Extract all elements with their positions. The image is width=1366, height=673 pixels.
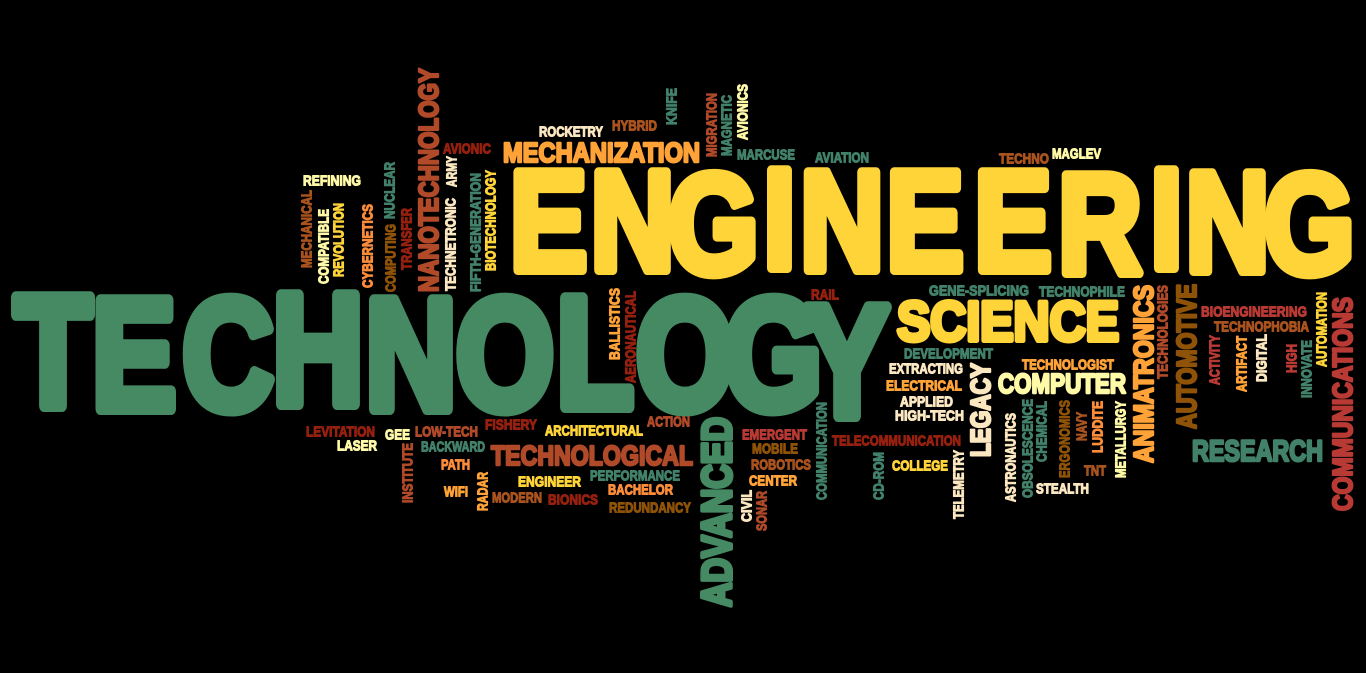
word: COMPUTER: COMPUTER (998, 368, 1126, 399)
word: LOW-TECH: LOW-TECH (415, 424, 478, 440)
word: CYBERNETICS: CYBERNETICS (360, 204, 376, 288)
word: SCIENCE: SCIENCE (897, 290, 1119, 352)
word: INNOVATE: INNOVATE (1298, 340, 1316, 398)
word: MAGLEV: MAGLEV (1052, 146, 1101, 162)
word: FISHERY: FISHERY (485, 416, 537, 434)
word: PERFORMANCE: PERFORMANCE (590, 468, 680, 484)
word: INSTITUTE: INSTITUTE (400, 443, 416, 503)
word: COLLEGE: COLLEGE (892, 458, 948, 474)
word: TECHNOLOGICAL: TECHNOLOGICAL (491, 440, 693, 471)
word: MAGNETIC: MAGNETIC (718, 95, 736, 156)
word: TELECOMMUNICATION: TELECOMMUNICATION (832, 432, 961, 450)
word: LEVITATION: LEVITATION (306, 424, 375, 440)
word: ROBOTICS: ROBOTICS (751, 456, 811, 474)
word: REVOLUTION: REVOLUTION (330, 203, 348, 277)
word: METALLURGY: METALLURGY (1112, 401, 1130, 478)
word: PATH: PATH (441, 456, 470, 474)
word: CIVIL: CIVIL (738, 490, 756, 522)
word: ARCHITECTURAL: ARCHITECTURAL (545, 422, 643, 440)
word: KNIFE: KNIFE (664, 88, 680, 125)
word: MARCUSE: MARCUSE (737, 146, 795, 164)
word: NANOTECHNOLOGY: NANOTECHNOLOGY (413, 68, 444, 292)
word: TECHNO: TECHNO (999, 150, 1049, 168)
word: COMMUNICATIONS: COMMUNICATIONS (1327, 297, 1358, 511)
word: LEGACY: LEGACY (965, 363, 996, 457)
word: ELECTRICAL: ELECTRICAL (886, 378, 962, 394)
word: RESEARCH: RESEARCH (1192, 435, 1323, 468)
word: REFINING: REFINING (303, 172, 361, 190)
word: TELEMETRY: TELEMETRY (950, 450, 968, 519)
word: COMMUNICATION: COMMUNICATION (814, 402, 830, 500)
word: AVIONIC: AVIONIC (443, 140, 491, 158)
word: ADVANCED: ADVANCED (693, 417, 740, 607)
word: TECHNOPHILE: TECHNOPHILE (1039, 284, 1125, 300)
word: ANIMATRONICS: ANIMATRONICS (1128, 285, 1159, 463)
word: RADAR: RADAR (474, 472, 492, 511)
word: MOBILE: MOBILE (752, 440, 798, 458)
word: TECHNOLOGIES: TECHNOLOGIES (1154, 285, 1172, 379)
word: TRANSFER: TRANSFER (398, 208, 416, 270)
word: ERGONOMICS: ERGONOMICS (1056, 400, 1074, 478)
word: LUDDITE: LUDDITE (1090, 401, 1106, 453)
word: ACTIVITY: ACTIVITY (1206, 335, 1224, 385)
word: AERONAUTICAL: AERONAUTICAL (622, 291, 640, 383)
word: ACTION: ACTION (647, 414, 690, 430)
word: ENGINEER: ENGINEER (518, 474, 581, 490)
word: TECHNETRONIC: TECHNETRONIC (442, 198, 460, 291)
word: GEE: GEE (385, 426, 410, 444)
word: MECHANIZATION: MECHANIZATION (503, 137, 700, 168)
word: AVIATION: AVIATION (815, 150, 869, 166)
word: DIGITAL: DIGITAL (1254, 334, 1270, 382)
word: FIFTH-GENERATION: FIFTH-GENERATION (468, 173, 484, 292)
word: CENTER: CENTER (749, 472, 797, 490)
word: BIOENGINEERING: BIOENGINEERING (1201, 304, 1307, 320)
word: BACHELOR: BACHELOR (608, 482, 673, 498)
word: NAVY: NAVY (1074, 412, 1090, 441)
word: AVIONICS: AVIONICS (734, 84, 752, 140)
word: STEALTH: STEALTH (1036, 480, 1089, 498)
word: ASTRONAUTICS: ASTRONAUTICS (1002, 413, 1020, 502)
word: HIGH: HIGH (1284, 344, 1300, 373)
word: AUTOMATION: AUTOMATION (1314, 292, 1330, 367)
word: REDUNDANCY: REDUNDANCY (609, 500, 691, 516)
word: CHEMICAL: CHEMICAL (1034, 401, 1050, 462)
word: TNT: TNT (1084, 462, 1106, 480)
word: APPLIED: APPLIED (900, 394, 953, 410)
word: MIGRATION: MIGRATION (704, 93, 720, 157)
word: BIOTECHNOLOGY: BIOTECHNOLOGY (482, 170, 500, 271)
word: BIONICS: BIONICS (548, 492, 598, 508)
word: RAIL: RAIL (811, 286, 839, 304)
word: TECHNOLOGY: TECHNOLOGY (14, 262, 889, 450)
word: SONAR: SONAR (754, 491, 770, 531)
word: BACKWARD: BACKWARD (421, 438, 485, 456)
word: ARTIFACT: ARTIFACT (1234, 336, 1250, 392)
word: TECHNOPHOBIA: TECHNOPHOBIA (1214, 318, 1309, 336)
word: MODERN: MODERN (492, 490, 542, 506)
word: EMERGENT: EMERGENT (742, 426, 807, 444)
word: CD-ROM: CD-ROM (870, 452, 888, 500)
word: HIGH-TECH: HIGH-TECH (895, 408, 964, 424)
word: AUTOMOTIVE: AUTOMOTIVE (1171, 284, 1202, 429)
word: ENGINEERING: ENGINEERING (510, 139, 1355, 304)
word: DEVELOPMENT: DEVELOPMENT (904, 346, 993, 362)
word: BALLISTICS: BALLISTICS (606, 288, 624, 360)
word: OBSOLESCENCE: OBSOLESCENCE (1020, 399, 1036, 498)
word: ARMY: ARMY (444, 156, 460, 187)
word: MECHANICAL: MECHANICAL (298, 190, 316, 268)
word: WIFI: WIFI (444, 484, 468, 500)
word: EXTRACTING: EXTRACTING (889, 360, 963, 378)
word: COMPUTING: COMPUTING (382, 224, 400, 292)
word: NUCLEAR: NUCLEAR (382, 162, 398, 219)
word: HYBRID: HYBRID (612, 118, 657, 134)
word: LASER: LASER (337, 438, 377, 454)
word: GENE-SPLICING: GENE-SPLICING (929, 282, 1029, 300)
word: TECHNOLOGIST: TECHNOLOGIST (1022, 356, 1114, 374)
word: ROCKETRY: ROCKETRY (539, 124, 603, 140)
word: COMPATIBLE: COMPATIBLE (316, 209, 332, 284)
